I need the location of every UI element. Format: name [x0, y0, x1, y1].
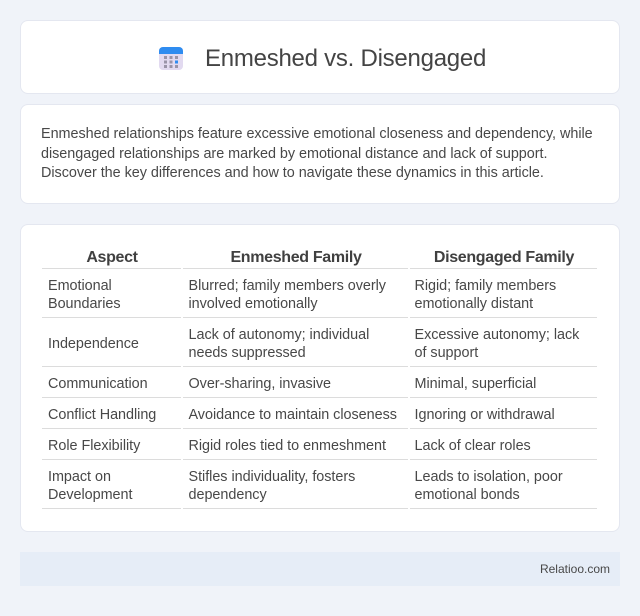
row: Impact on Development: Stifles individuality, fosters — [188, 469, 355, 485]
intro text: disengaged relationships are marked by emotional distance and lack of support. — [41, 146, 547, 162]
row: Conflict Handling: Avoidance to maintain closeness — [188, 407, 397, 423]
row: Emotional Boundaries: Boundaries — [48, 296, 121, 312]
panel: introduction — [20, 104, 620, 204]
row: Conflict Handling — [48, 407, 555, 423]
row: Independence: of support — [414, 345, 478, 361]
row: Independence — [48, 327, 580, 361]
row: Impact on Development: Leads to isolation, poor — [414, 469, 563, 485]
footer text: Relatioo.com — [540, 562, 610, 576]
row: Emotional Boundaries: Rigid; family members — [414, 278, 556, 294]
row: Independence: Independence — [48, 336, 139, 352]
row: Impact on Development: Impact on — [48, 469, 111, 485]
row: Conflict Handling: Ignoring or withdrawal — [414, 407, 555, 423]
row: Impact on Development: Development — [48, 487, 132, 503]
row: Independence: Lack of autonomy; individual — [188, 327, 369, 343]
table header: Aspect — [86, 249, 138, 266]
panel: comparison table — [20, 224, 620, 532]
row: Role Flexibility: Lack of clear roles — [414, 438, 531, 454]
row: Communication: Minimal, superficial — [414, 376, 536, 392]
table header — [86, 249, 574, 266]
intro text — [41, 126, 593, 181]
row: Emotional Boundaries: Blurred; family members overly — [188, 278, 386, 294]
row: Communication — [48, 376, 536, 392]
intro text: Enmeshed relationships feature excessive emotional closeness and dependency, while — [41, 126, 593, 142]
row: Emotional Boundaries: emotionally distant — [414, 296, 533, 312]
title: Enmeshed vs. Disengaged — [205, 45, 486, 72]
row: Role Flexibility — [48, 438, 531, 454]
row: Communication: Communication — [48, 376, 148, 392]
row: Independence: needs suppressed — [188, 345, 306, 361]
footer bar — [20, 552, 620, 586]
row: Role Flexibility: Rigid roles tied to enmeshment — [188, 438, 386, 454]
row: Role Flexibility: Role Flexibility — [48, 438, 140, 454]
row: Emotional Boundaries: Emotional — [48, 278, 112, 294]
panel: title header — [20, 20, 620, 94]
row: Impact on Development: dependency — [188, 487, 267, 503]
row: Independence: Excessive autonomy; lack — [414, 327, 579, 343]
row: Conflict Handling: Conflict Handling — [48, 407, 156, 423]
table header: Disengaged Family — [434, 249, 574, 266]
row: Emotional Boundaries — [48, 278, 556, 312]
icon: calendar — [159, 47, 183, 70]
intro text: Discover the key differences and how to navigate these dynamics in this article. — [41, 165, 544, 181]
row: Impact on Development: emotional bonds — [414, 487, 520, 503]
table header: Enmeshed Family — [230, 249, 362, 266]
row: Communication: Over-sharing, invasive — [188, 376, 331, 392]
row: Impact on Development — [48, 469, 563, 503]
row: Emotional Boundaries: involved emotionally — [188, 296, 318, 312]
